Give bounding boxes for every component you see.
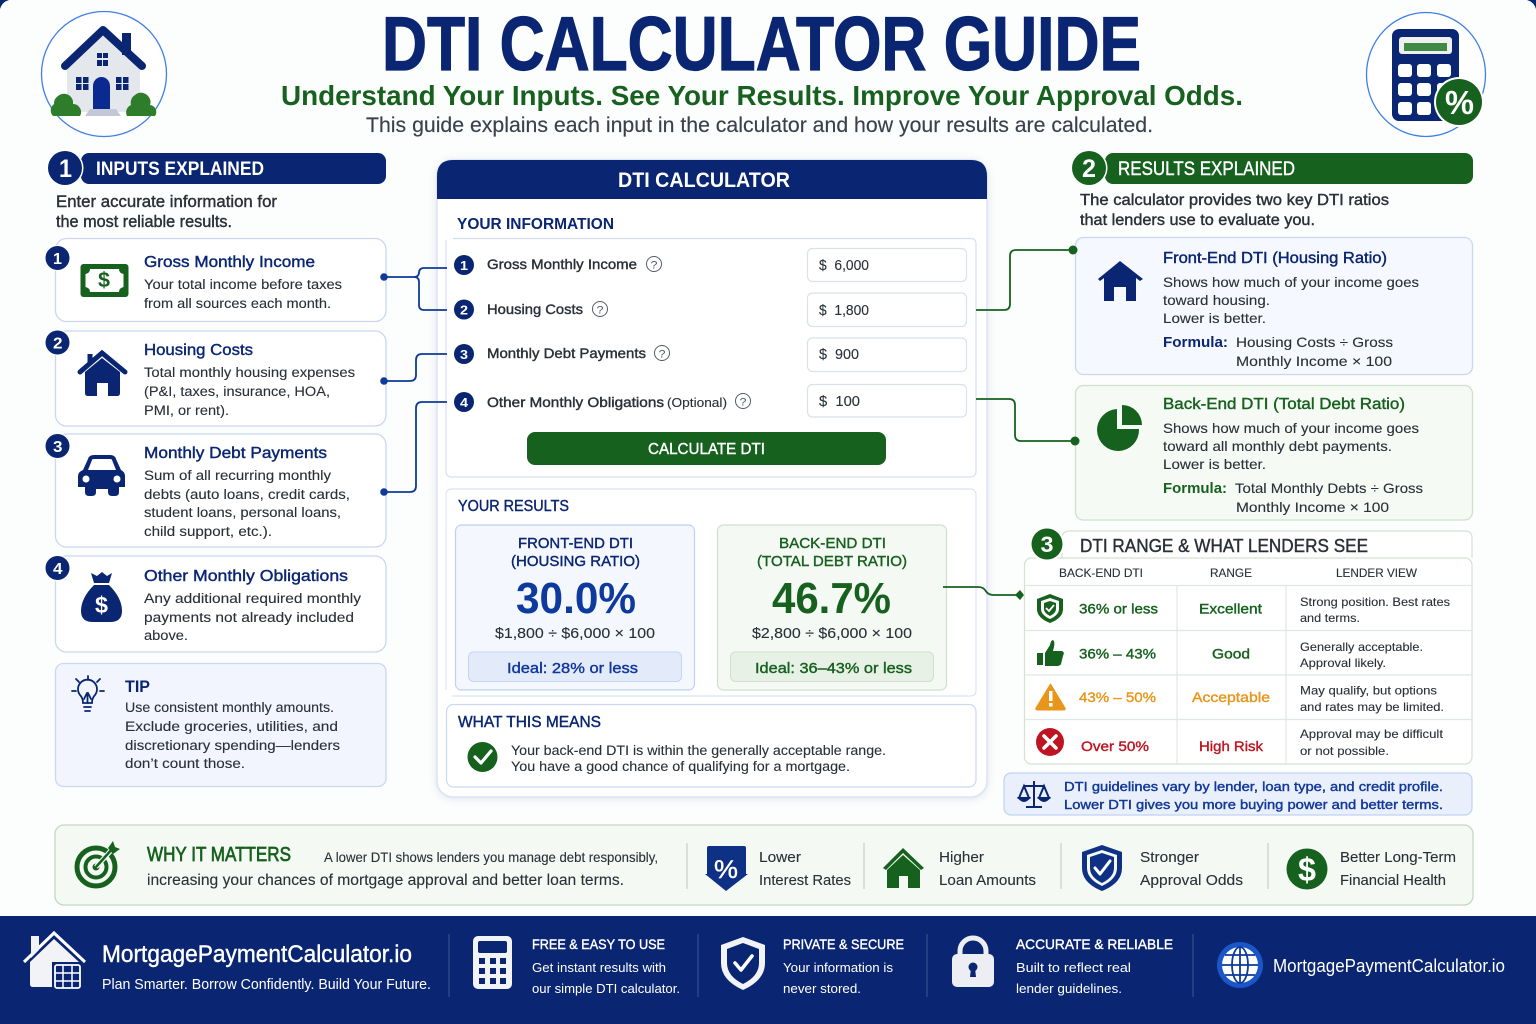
benefit: lower interest rates: Interest Rates (759, 872, 851, 889)
row: good (1037, 640, 1423, 670)
text: inputs intro: Enter accurate information for (56, 193, 278, 211)
card: back-end DTI: Lower is better. (1163, 456, 1266, 472)
calculator header: DTI CALCULATOR (618, 169, 790, 192)
row: monthly debt payments: ? (658, 348, 666, 360)
icon: house logo (42, 12, 166, 136)
icon: shield (1037, 594, 1063, 623)
icon: calculator with percent badge: % (1445, 84, 1474, 121)
feature: free and easy: FREE & EASY TO USE (532, 936, 665, 952)
benefit: higher loan amounts: Loan Amounts (939, 872, 1036, 889)
card: gross monthly income: Your total income before taxes (144, 277, 342, 292)
brand block (24, 933, 431, 993)
feature: private and secure: PRIVATE & SECURE (783, 936, 904, 952)
card: housing costs: Housing Costs (144, 342, 253, 359)
row: gross monthly income: ? (650, 260, 658, 272)
feature: private and secure (721, 936, 904, 996)
card: housing costs: (P&I, taxes, insurance, HOA, (144, 384, 330, 399)
heading: your results: YOUR RESULTS (458, 498, 569, 515)
panel: tip: discretionary spending—lenders (125, 738, 340, 753)
panel: what this means: You have a good chance of qualifying for a mortgage. (511, 759, 850, 774)
result: front-end DTI: (HOUSING RATIO) (511, 553, 640, 570)
row: other monthly obligations: (Optional) (667, 396, 727, 410)
card: back-end DTI: Shows how much of your income goes (1163, 420, 1419, 436)
card: monthly debt payments: child support, etc.). (144, 524, 272, 539)
panel: DTI calculator (437, 160, 987, 797)
card: front-end DTI: Shows how much of your income goes (1163, 274, 1419, 290)
panel: DTI range table (1024, 526, 1472, 764)
card: front-end DTI (1076, 238, 1472, 374)
card: other monthly obligations: 4 (53, 561, 63, 578)
row: good: 36% – 43% (1079, 646, 1156, 662)
icon: house with grid (24, 933, 85, 988)
icon: light bulb (72, 676, 104, 711)
row: acceptable: Acceptable (1192, 689, 1270, 705)
card: back-end DTI: Monthly Income × 100 (1236, 499, 1389, 515)
benefit: better long-term financial health: $ (1298, 851, 1316, 888)
row: good: Generally acceptable. (1300, 640, 1423, 654)
card: monthly debt payments: Sum of all recurring monthly (144, 468, 331, 483)
heading: range table: 3 (1040, 532, 1054, 557)
card: other monthly obligations: payments not already included (144, 610, 354, 625)
card: housing costs (44, 330, 386, 426)
card: monthly debt payments: Monthly Debt Payments (144, 445, 327, 462)
benefit: better long-term financial health (1286, 848, 1456, 890)
button: calculate DTI (527, 432, 886, 465)
icon: dollar bill: $ (98, 269, 110, 292)
benefit: lower interest rates: Lower (759, 849, 801, 866)
row: gross monthly income (454, 248, 966, 282)
row: housing costs: $ 1,800 (819, 303, 869, 319)
benefit: lower interest rates: % (714, 856, 738, 884)
card: back-end DTI: Formula: (1163, 481, 1227, 497)
benefit: stronger approval odds (1082, 845, 1243, 891)
row: acceptable: 43% – 50% (1079, 689, 1156, 705)
result: back-end DTI: Ideal: 36–43% or less (755, 660, 912, 677)
row: other monthly obligations: Other Monthly Obligations (487, 394, 664, 410)
feature: private and secure: never stored. (783, 981, 861, 996)
icon: x circle (1036, 728, 1064, 756)
intro line: This guide explains each input in the calculator and how your results are calculated. (366, 114, 1153, 137)
row: monthly debt payments: Monthly Debt Payments (487, 345, 646, 361)
row: acceptable (1036, 684, 1444, 714)
row: gross monthly income: Gross Monthly Income (487, 256, 637, 272)
panel: what this means: WHAT THIS MEANS (458, 714, 601, 731)
website block: MortgagePaymentCalculator.io (1273, 956, 1505, 976)
table header: RANGE (1210, 566, 1252, 580)
card: front-end DTI: Front-End DTI (Housing Ratio) (1163, 250, 1387, 267)
row: excellent (1037, 594, 1450, 625)
card: front-end DTI: Formula: (1163, 335, 1228, 351)
icon: target (77, 841, 120, 886)
row: other monthly obligations: 4 (460, 395, 469, 410)
brand block: MortgagePaymentCalculator.io (102, 941, 412, 968)
panel: what this means: Your back-end DTI is within the generally acceptable range. (511, 743, 886, 758)
result: front-end DTI: $1,800 ÷ $6,000 × 100 (495, 625, 655, 642)
subtitle: Understand Your Inputs. See Your Results. Improve Your Approval Odds. (281, 80, 1243, 111)
panel: why it matters: WHY IT MATTERS (147, 844, 291, 866)
result: front-end DTI: Ideal: 28% or less (507, 660, 638, 677)
row: monthly debt payments: 3 (460, 347, 468, 362)
card: other monthly obligations (44, 555, 386, 652)
card: other monthly obligations: Other Monthly Obligations (144, 568, 348, 585)
row: gross monthly income: $ 6,000 (819, 258, 869, 274)
row: acceptable: and rates may be limited. (1300, 700, 1444, 714)
panel: your results (446, 489, 976, 696)
card: front-end DTI: Monthly Income × 100 (1236, 353, 1392, 369)
result: back-end DTI: (TOTAL DEBT RATIO) (757, 553, 907, 570)
arrow: back-end DTI to range table (943, 587, 1024, 600)
icon: house (80, 353, 125, 396)
heading: results explained (1070, 150, 1473, 186)
panel: why it matters: A lower DTI shows lenders you manage debt responsibly, (324, 849, 658, 865)
benefit: higher loan amounts: Higher (939, 849, 984, 866)
card: gross monthly income: 1 (53, 251, 62, 268)
connectors: inputs to calculator (380, 268, 447, 496)
card: gross monthly income: from all sources each month. (144, 296, 331, 311)
card: front-end DTI: Lower is better. (1163, 310, 1266, 326)
card: back-end DTI: toward all monthly debt payments. (1163, 438, 1392, 454)
row: other monthly obligations (454, 384, 966, 417)
benefit: stronger approval odds: Stronger (1140, 849, 1199, 866)
result: back-end DTI: 46.7% (772, 574, 891, 623)
card: monthly debt payments: 3 (53, 439, 63, 456)
row: housing costs: ? (596, 304, 604, 316)
heading: range table: DTI RANGE & WHAT LENDERS SEE (1080, 536, 1368, 556)
table header: LENDER VIEW (1336, 566, 1418, 580)
row: high risk: Approval may be difficult (1300, 727, 1444, 741)
text: results intro: that lenders use to evaluate you. (1080, 212, 1315, 229)
icon: check circle (468, 742, 498, 772)
card: back-end DTI (1076, 386, 1472, 520)
card: front-end DTI: toward housing. (1163, 292, 1270, 308)
text: results intro (1080, 192, 1389, 229)
row: high risk: High Risk (1199, 738, 1264, 754)
feature: free and easy: our simple DTI calculator. (532, 981, 680, 996)
feature: accurate and reliable (952, 936, 1173, 996)
row: high risk: Over 50% (1081, 738, 1149, 754)
heading: inputs explained: 1 (59, 155, 72, 183)
result: back-end DTI (718, 525, 946, 690)
result: front-end DTI: 30.0% (516, 574, 636, 623)
heading: results explained: RESULTS EXPLAINED (1118, 158, 1295, 180)
row: excellent: and terms. (1300, 611, 1360, 625)
feature: free and easy: Get instant results with (532, 960, 666, 975)
card: housing costs: Total monthly housing expenses (144, 365, 355, 380)
icon: warning triangle (1036, 684, 1065, 710)
row: high risk (1036, 727, 1444, 758)
card: housing costs: PMI, or rent). (144, 403, 229, 418)
panel: tip: don’t count those. (125, 756, 245, 771)
card: monthly debt payments: debts (auto loans, credit cards, (144, 487, 350, 502)
row: monthly debt payments (454, 338, 966, 372)
heading: inputs explained (46, 150, 386, 186)
panel: tip: Use consistent monthly amounts. (125, 700, 334, 715)
card: back-end DTI: Total Monthly Debts ÷ Gross (1235, 480, 1423, 496)
row: excellent: 36% or less (1079, 600, 1158, 616)
panel: tip: TIP (125, 678, 150, 696)
card: monthly debt payments (44, 433, 386, 547)
row: housing costs: 2 (460, 302, 468, 318)
website block (1217, 942, 1505, 988)
row: good: Approval likely. (1300, 656, 1386, 670)
card: other monthly obligations: above. (144, 628, 188, 643)
row: gross monthly income: 1 (460, 258, 468, 273)
feature: accurate and reliable: lender guidelines. (1016, 981, 1122, 996)
icon: scales (1019, 781, 1049, 807)
result: back-end DTI: $2,800 ÷ $6,000 × 100 (752, 625, 912, 642)
feature: free and easy (473, 936, 680, 996)
result: front-end DTI: FRONT-END DTI (518, 535, 633, 552)
table header: BACK-END DTI (1059, 566, 1143, 580)
icon: pie chart (1097, 405, 1142, 451)
benefit: lower interest rates (705, 846, 851, 891)
card: back-end DTI: Back-End DTI (Total Debt Ratio) (1163, 396, 1405, 413)
table header (1059, 566, 1418, 580)
row: acceptable: May qualify, but options (1300, 684, 1437, 698)
icon: calculator with percent badge (1366, 12, 1486, 136)
card: other monthly obligations: Any additional required monthly (144, 591, 361, 606)
heading: range table (1030, 526, 1368, 562)
card: gross monthly income (44, 238, 386, 322)
text: results intro: The calculator provides two key DTI ratios (1080, 192, 1389, 209)
feature: accurate and reliable: ACCURATE & RELIABLE (1016, 936, 1173, 952)
icon: house (1098, 261, 1143, 301)
icon: car (78, 455, 125, 496)
benefit: higher loan amounts (883, 848, 1036, 889)
panel: why it matters (55, 825, 1473, 905)
text: inputs intro: the most reliable results. (56, 213, 232, 231)
text: inputs intro (56, 193, 278, 231)
benefit: better long-term financial health: Better Long-Term (1340, 849, 1456, 866)
result: front-end DTI (456, 525, 694, 690)
row: high risk: or not possible. (1300, 744, 1389, 758)
footer (0, 916, 1536, 1024)
calculator header (437, 160, 987, 199)
panel: why it matters: increasing your chances of mortgage approval and better loan terms. (147, 872, 624, 889)
icon: money bag (81, 572, 122, 622)
connectors: calculator to results (976, 246, 1080, 446)
brand block: Plan Smarter. Borrow Confidently. Build Your Future. (102, 976, 431, 993)
callout: DTI guidelines note: DTI guidelines vary by lender, loan type, and credit profile. (1064, 779, 1443, 794)
row: excellent: Strong position. Best rates (1300, 595, 1450, 609)
callout: DTI guidelines note: Lower DTI gives you more buying power and better terms. (1064, 797, 1443, 812)
row: monthly debt payments: $ 900 (819, 347, 859, 363)
row: housing costs: Housing Costs (487, 301, 583, 317)
row: other monthly obligations: $ 100 (819, 394, 860, 410)
row: excellent: Excellent (1199, 600, 1262, 616)
icon: money bag: $ (95, 592, 108, 618)
feature: accurate and reliable: Built to reflect real (1016, 960, 1131, 975)
feature: private and secure: Your information is (783, 960, 894, 975)
panel: tip: Exclude groceries, utilities, and (125, 719, 338, 734)
result: back-end DTI: BACK-END DTI (779, 535, 886, 552)
panel: information inputs (446, 238, 976, 477)
row: housing costs (454, 293, 966, 326)
card: monthly debt payments: student loans, personal loans, (144, 505, 341, 520)
card: gross monthly income: Gross Monthly Income (144, 254, 315, 271)
callout: DTI guidelines note (1004, 773, 1472, 815)
button: calculate DTI: CALCULATE DTI (648, 441, 765, 458)
benefit: stronger approval odds: Approval Odds (1140, 872, 1243, 889)
heading: inputs explained: INPUTS EXPLAINED (96, 158, 264, 180)
icon: thumbs up (1037, 640, 1064, 666)
title: DTI CALCULATOR GUIDE (382, 2, 1141, 87)
icon: dollar bill (80, 264, 128, 297)
card: front-end DTI: Housing Costs ÷ Gross (1236, 334, 1393, 350)
heading: your information: YOUR INFORMATION (457, 216, 614, 233)
panel: tip (56, 664, 386, 786)
panel: what this means (446, 704, 976, 787)
benefit: better long-term financial health: Financial Health (1340, 872, 1446, 889)
row: good: Good (1212, 646, 1250, 662)
card: housing costs: 2 (53, 336, 63, 352)
heading: results explained: 2 (1082, 155, 1096, 183)
row: other monthly obligations: ? (740, 396, 746, 408)
